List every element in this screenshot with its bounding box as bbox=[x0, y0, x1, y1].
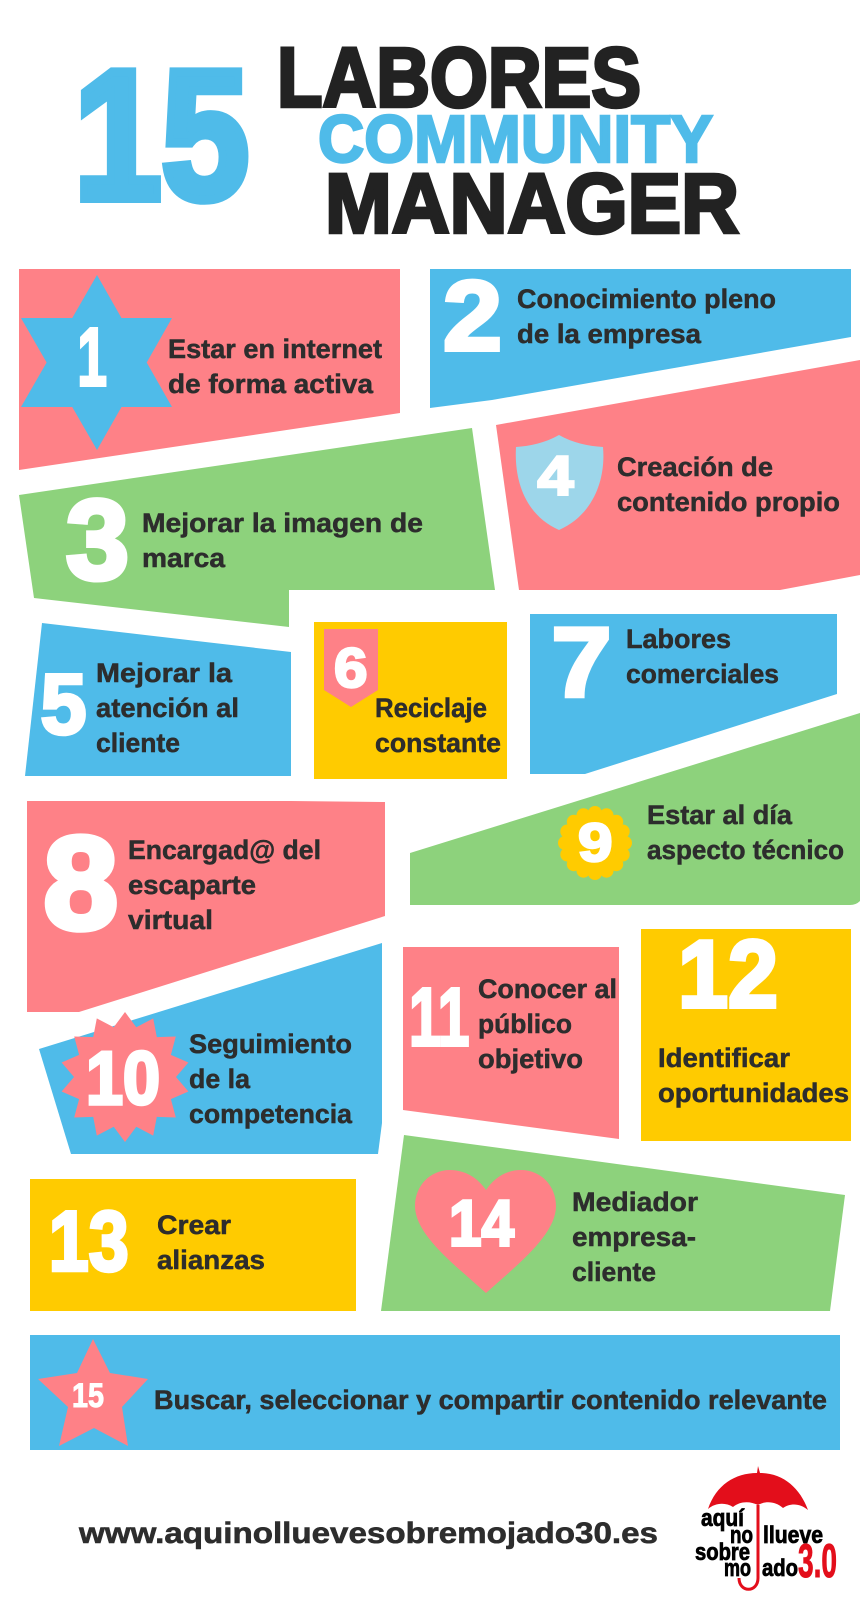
icon: pink burst bbox=[62, 1012, 188, 1142]
text 4: Creación de bbox=[617, 452, 773, 482]
text 7 bbox=[626, 624, 779, 689]
umbrella handle bbox=[739, 1505, 758, 1589]
text 6: constante bbox=[375, 728, 501, 758]
panel 9: aspecto tecnico bbox=[410, 713, 860, 905]
panel 2: conocimiento pleno bbox=[430, 260, 851, 408]
panel 1: estar en internet bbox=[19, 269, 400, 470]
number 9: 9 bbox=[578, 813, 612, 873]
panel 6: reciclaje constante bbox=[314, 622, 507, 779]
text 2: de la empresa bbox=[517, 319, 702, 349]
text 10: de la bbox=[189, 1064, 251, 1094]
number 6: 6 bbox=[334, 636, 368, 699]
text 12: Identificar bbox=[658, 1043, 791, 1073]
panel 7: labores comerciales bbox=[530, 607, 837, 774]
panel 4 background bbox=[496, 360, 860, 590]
text 11: público bbox=[478, 1009, 572, 1039]
number 7: 7 bbox=[552, 607, 612, 717]
text 7: Labores bbox=[626, 624, 731, 654]
panel 11: conocer al publico bbox=[403, 947, 619, 1139]
text 1: de forma activa bbox=[168, 369, 374, 399]
text 9 bbox=[647, 800, 844, 865]
icon: shield bbox=[516, 435, 603, 530]
number 1: 1 bbox=[77, 310, 107, 404]
number 10: 10 bbox=[86, 1036, 160, 1120]
text 13: alianzas bbox=[157, 1245, 265, 1275]
text 14: cliente bbox=[572, 1257, 656, 1287]
text 3: marca bbox=[142, 543, 226, 573]
panel 5 background bbox=[25, 623, 291, 776]
big number 15: 15 bbox=[74, 32, 249, 238]
text 11: objetivo bbox=[478, 1044, 583, 1074]
text 12 bbox=[658, 1043, 849, 1108]
text 6 bbox=[375, 693, 501, 758]
website url: www.aquinolluevesobremojado30.es bbox=[78, 1517, 658, 1550]
text 2: Conocimiento pleno bbox=[517, 284, 776, 314]
number 12: 12 bbox=[678, 921, 778, 1028]
text 8 bbox=[128, 835, 321, 935]
panel 10 background bbox=[39, 943, 382, 1154]
icon: scalloped yellow badge bbox=[558, 806, 632, 880]
number 14: 14 bbox=[449, 1186, 514, 1260]
text 14: empresa- bbox=[572, 1222, 696, 1252]
panel 10: seguimiento competencia bbox=[39, 943, 382, 1154]
text 1: Estar en internet bbox=[168, 334, 382, 364]
text 4: contenido propio bbox=[617, 487, 840, 517]
text 13: Crear bbox=[157, 1210, 232, 1240]
panel 7 background bbox=[530, 614, 837, 774]
number 5: 5 bbox=[40, 658, 86, 752]
panel 2 background bbox=[430, 269, 851, 408]
logo wordmark: llueve bbox=[763, 1522, 823, 1549]
umbrella canopy bbox=[708, 1466, 808, 1510]
text 9: Estar al día bbox=[647, 800, 793, 830]
panel 8 background bbox=[27, 801, 385, 1012]
text 8: virtual bbox=[128, 905, 213, 935]
logo wordmark: sobre bbox=[695, 1539, 750, 1566]
text 13 bbox=[157, 1210, 265, 1275]
text 8: escaparte bbox=[128, 870, 256, 900]
number 11: 11 bbox=[409, 970, 470, 1064]
text 5: atención al bbox=[96, 693, 239, 723]
text 5: Mejorar la bbox=[96, 658, 233, 688]
heading: COMMUNITY: COMMUNITY bbox=[318, 102, 713, 177]
icon: pink ribbon badge bbox=[324, 629, 378, 707]
icon: pink star bbox=[38, 1339, 148, 1446]
text 11 bbox=[478, 974, 617, 1074]
text 12: oportunidades bbox=[658, 1078, 849, 1108]
text 2 bbox=[517, 284, 776, 349]
logo wordmark: no bbox=[730, 1522, 753, 1549]
heading: LABORES: LABORES bbox=[277, 30, 641, 124]
text 14 bbox=[572, 1187, 699, 1287]
text 10 bbox=[189, 1029, 353, 1129]
panel 3: mejorar la imagen bbox=[19, 428, 495, 627]
icon: heart bbox=[415, 1170, 556, 1293]
text 10: competencia bbox=[189, 1099, 353, 1129]
panel 12: identificar oportunidades bbox=[641, 921, 851, 1141]
number 13: 13 bbox=[49, 1194, 129, 1290]
text 3: Mejorar la imagen de bbox=[142, 508, 423, 538]
panel 14 background bbox=[381, 1135, 845, 1311]
panel 1 background bbox=[19, 269, 400, 470]
text 5 bbox=[96, 658, 239, 758]
icon: six-pointed star bbox=[21, 275, 172, 450]
panel 15 background bbox=[30, 1335, 840, 1450]
text 15: Buscar, seleccionar y compartir contenido relevante bbox=[154, 1385, 827, 1415]
text 4 bbox=[617, 452, 840, 517]
panel 12 background bbox=[641, 929, 851, 1141]
panel 8: escaparate virtual bbox=[27, 801, 385, 1012]
heading: MANAGER: MANAGER bbox=[325, 156, 739, 250]
logo wordmark: ado bbox=[762, 1555, 798, 1582]
number 15 small: 15 bbox=[72, 1377, 104, 1415]
text 7: comerciales bbox=[626, 659, 779, 689]
panel 9 background bbox=[410, 713, 860, 905]
panel 11 background bbox=[403, 947, 619, 1139]
text 3 bbox=[142, 508, 423, 573]
text 1 bbox=[168, 334, 382, 399]
text 6: Reciclaje bbox=[375, 693, 487, 723]
panel 13 background bbox=[30, 1179, 356, 1311]
panel 3 background bbox=[19, 428, 495, 627]
logo: red umbrella bbox=[695, 1466, 837, 1589]
number 8: 8 bbox=[44, 810, 118, 956]
panel 13: crear alianzas bbox=[30, 1179, 356, 1311]
number 4: 4 bbox=[538, 444, 574, 507]
logo wordmark: mo bbox=[724, 1555, 751, 1582]
text 8: Encargad@ del bbox=[128, 835, 321, 865]
text 5: cliente bbox=[96, 728, 180, 758]
panel 15: buscar contenido bbox=[30, 1335, 840, 1450]
text 10: Seguimiento bbox=[189, 1029, 352, 1059]
number 2: 2 bbox=[443, 260, 502, 371]
logo wordmark: aquí bbox=[701, 1505, 745, 1532]
text 9: aspecto técnico bbox=[647, 835, 844, 865]
panel 5: atencion al cliente bbox=[25, 623, 291, 776]
logo wordmark bbox=[695, 1505, 837, 1587]
number 3: 3 bbox=[66, 476, 129, 602]
panel 4: creacion de contenido bbox=[496, 360, 860, 590]
title bbox=[74, 30, 739, 250]
text 14: Mediador bbox=[572, 1187, 699, 1217]
panel 14: mediador empresa-cliente bbox=[381, 1135, 845, 1311]
panel 6 background bbox=[314, 622, 507, 779]
text 11: Conocer al bbox=[478, 974, 617, 1004]
